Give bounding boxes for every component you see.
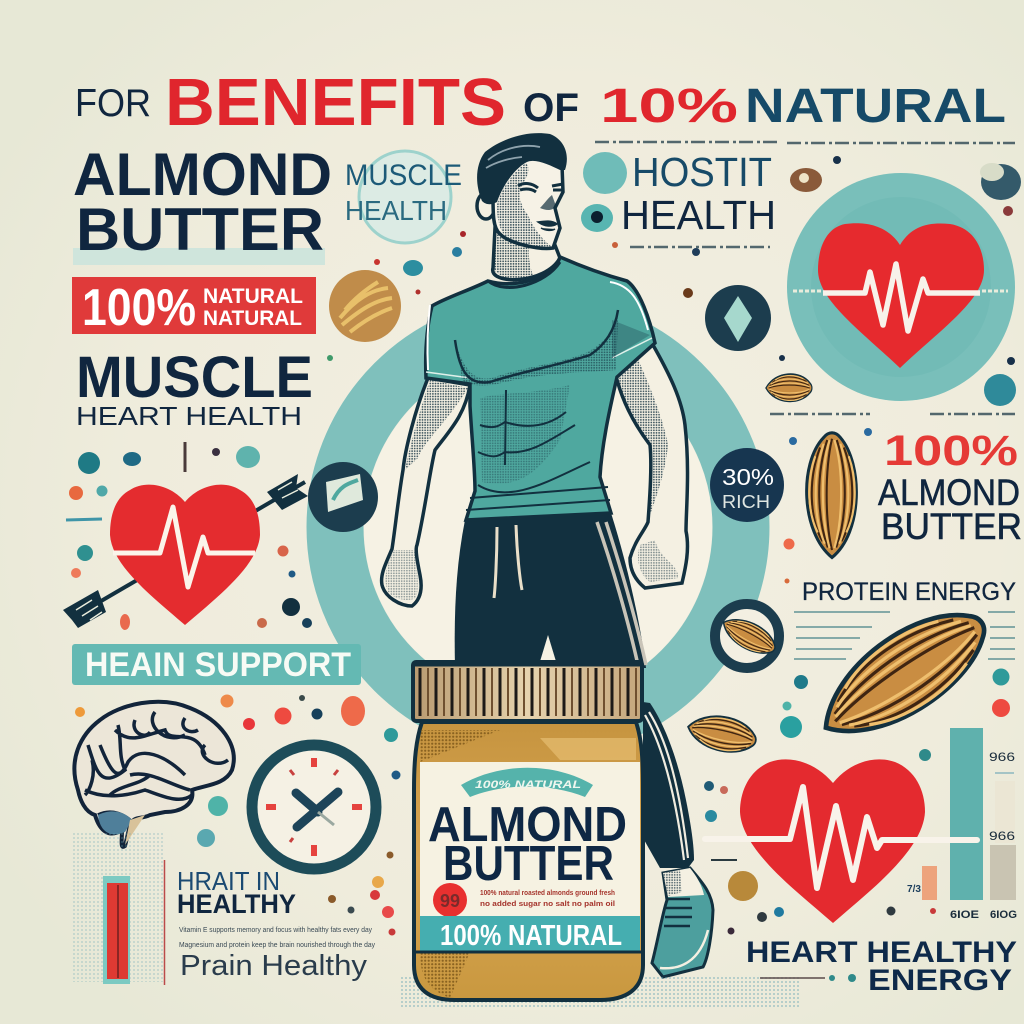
label ribbon: 100% NATURAL bbox=[475, 779, 581, 791]
abs bbox=[480, 385, 570, 484]
heading: almond butter: ALMOND bbox=[73, 141, 332, 208]
label small print bbox=[480, 890, 615, 908]
text block: brain health: Prain Healthy bbox=[180, 950, 368, 982]
bar chart bbox=[907, 728, 1017, 921]
brain icon bbox=[74, 702, 234, 847]
lid bbox=[413, 662, 642, 721]
shirt bbox=[426, 257, 655, 520]
heading: host health: HOSTIT bbox=[632, 149, 772, 195]
badge: 100% natural: 100% bbox=[82, 279, 196, 337]
label small print: 100% natural roasted almonds ground fresh bbox=[480, 890, 615, 897]
hair bbox=[477, 133, 567, 204]
muscle health bubble: MUSCLE bbox=[345, 159, 462, 192]
title: FOR bbox=[75, 82, 151, 125]
almond: large bbox=[804, 591, 1002, 758]
heading: heart healthy energy bbox=[746, 936, 1017, 997]
clock icon bbox=[252, 745, 376, 869]
label small print: no added sugar no salt no palm oil bbox=[480, 901, 615, 908]
top right dash lines bbox=[595, 142, 1015, 414]
man figure bbox=[382, 133, 713, 977]
text block: brain health: Vitamin E supports memory and focus with healthy fats every day bbox=[179, 927, 372, 934]
red seal bbox=[433, 883, 467, 917]
almond: round bbox=[329, 270, 401, 342]
pants bbox=[455, 513, 646, 668]
arrow fletching left bbox=[63, 590, 106, 628]
heading: host health bbox=[621, 149, 776, 238]
almond: ring bbox=[715, 604, 780, 668]
shirt chest shadow bbox=[458, 318, 618, 386]
red seal: 99 bbox=[440, 891, 460, 911]
almond: vertical bbox=[807, 433, 856, 558]
muscle health bubble bbox=[345, 151, 462, 243]
heading: heart healthy energy: HEART HEALTHY bbox=[746, 936, 1017, 969]
lower leg bbox=[643, 702, 694, 868]
almond side lines bbox=[794, 612, 1015, 659]
dark circle: diamond bbox=[705, 285, 771, 351]
text block: brain health: Magnesium and protein keep the brain nourished through the day bbox=[179, 942, 375, 949]
scattered dots bbox=[66, 156, 1021, 982]
heading: muscle: MUSCLE bbox=[76, 345, 313, 410]
badge: 100% natural bbox=[72, 277, 316, 337]
almond: small lower bbox=[685, 710, 759, 757]
dark circle: 30% rich bbox=[710, 448, 784, 522]
head bbox=[477, 193, 495, 219]
ground halftone bbox=[400, 975, 800, 1007]
label title: ALMOND bbox=[428, 798, 627, 852]
bottom left dotted panel bbox=[72, 832, 164, 982]
face shading bbox=[497, 163, 552, 247]
title: OF bbox=[523, 86, 579, 130]
banner: heain support: HEAIN SUPPORT bbox=[85, 646, 351, 684]
bar chart: 6IOG bbox=[990, 909, 1017, 921]
arrow fletching right bbox=[267, 474, 308, 510]
bar chart: 966 bbox=[989, 750, 1015, 764]
almond butter jar bbox=[413, 662, 643, 1000]
heading: almond butter bbox=[73, 141, 332, 265]
badge: 100% natural: NATURAL bbox=[203, 285, 303, 308]
almond: small upper bbox=[766, 374, 812, 401]
jar label bbox=[420, 762, 640, 917]
icon: eye bbox=[581, 204, 613, 232]
shoe bbox=[652, 868, 713, 977]
dark circle: 30% rich: RICH bbox=[722, 492, 770, 512]
red gauge bbox=[103, 876, 130, 984]
teal band: 100% NATURAL bbox=[440, 920, 622, 952]
dark circle icon bbox=[308, 462, 378, 532]
right arm bbox=[613, 345, 688, 588]
badge: 100% natural: NATURAL bbox=[203, 307, 302, 330]
title bbox=[75, 65, 1006, 140]
icon: teal blob bbox=[583, 152, 627, 194]
text block: brain health bbox=[177, 866, 375, 982]
heading: 100% almond butter bbox=[878, 427, 1022, 547]
heading: almond butter: BUTTER bbox=[76, 196, 324, 263]
label ribbon bbox=[461, 768, 593, 797]
heading: heart healthy energy: ENERGY bbox=[868, 964, 1012, 997]
text block: brain health: HEALTHY bbox=[177, 889, 296, 919]
jar body bbox=[414, 722, 643, 1000]
heading: 100% almond butter: 100% bbox=[884, 427, 1018, 475]
neck bbox=[493, 228, 560, 280]
left arm bbox=[382, 378, 470, 606]
title: BENEFITS bbox=[165, 65, 506, 140]
big teal ring bbox=[335, 324, 741, 730]
left heart with arrow bbox=[63, 474, 308, 628]
bar chart: 6IOE bbox=[950, 909, 979, 921]
dark circle: 30% rich: 30% bbox=[722, 464, 774, 490]
heading: host health: HEALTH bbox=[621, 192, 776, 238]
bottom right heart bbox=[740, 759, 925, 923]
top right heart panel bbox=[787, 173, 1015, 401]
heading: protein energy: PROTEIN ENERGY bbox=[802, 578, 1016, 606]
ecg line bbox=[705, 787, 977, 888]
title: NATURAL bbox=[745, 80, 1006, 133]
bar chart: 7/3 bbox=[907, 884, 921, 895]
muscle health bubble: HEALTH bbox=[345, 195, 447, 226]
text block: brain health: HRAIT IN bbox=[177, 866, 280, 896]
almond butter jar: BUTTER bbox=[443, 837, 614, 891]
bar chart: 966 bbox=[989, 829, 1015, 843]
heading: muscle: HEART HEALTH bbox=[76, 401, 302, 431]
title: 10% bbox=[600, 80, 738, 133]
